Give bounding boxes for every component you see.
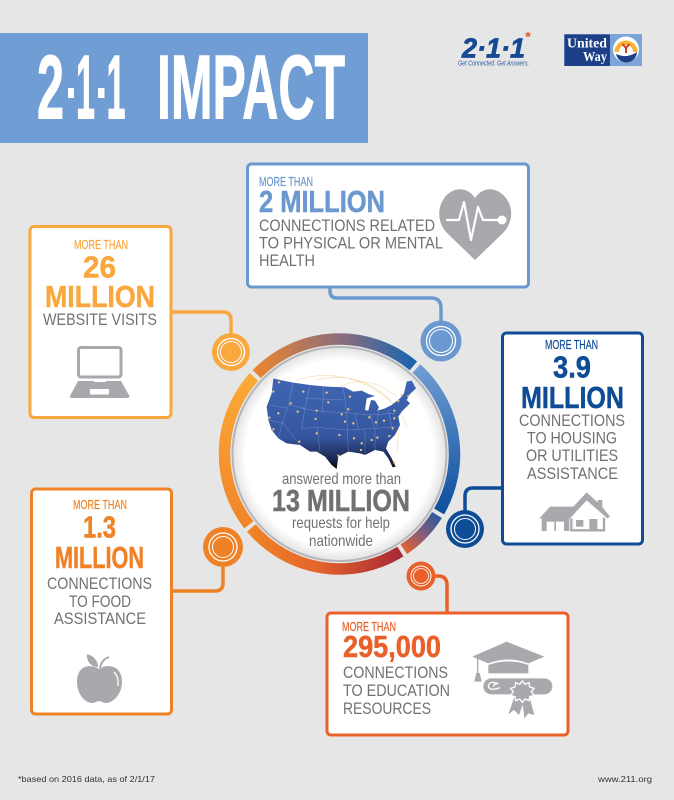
panel: food [32, 489, 172, 714]
panel: housing [502, 333, 642, 544]
heading: 3.9 million [521, 338, 624, 415]
text: housing description: CONNECTIONS [519, 411, 625, 430]
footnote: *based on 2016 data, as of 2/1/17 [18, 774, 155, 784]
text: housing description [519, 411, 625, 483]
heading: 3.9 million: 3.9 [553, 350, 591, 384]
text: education description: CONNECTIONS [343, 663, 448, 682]
icon: graduation cap and diploma [472, 642, 552, 718]
node: website [212, 333, 250, 371]
text: food description [47, 574, 152, 628]
text: education description [343, 663, 450, 718]
panel: education [327, 613, 568, 735]
heading: 3.9 million: MILLION [521, 380, 624, 415]
title banner [0, 33, 368, 143]
icon: house [539, 492, 610, 531]
text: education description: TO EDUCATION [343, 681, 450, 700]
connector: website [171, 312, 231, 338]
logo: 2-1-1: 2·1·1 [461, 32, 525, 64]
text: education description: RESOURCES [343, 699, 431, 718]
text: health description: TO PHYSICAL OR MENTAL [259, 234, 443, 252]
panel: health [248, 164, 528, 287]
text: housing description: OR UTILITIES [526, 446, 618, 465]
title: 1 [76, 38, 95, 138]
heading: 1.3 million [55, 498, 144, 575]
title: IMPACT [157, 38, 345, 138]
panel: website visits [30, 226, 171, 418]
central text: requests for help [292, 515, 390, 532]
text: health description: HEALTH [259, 251, 315, 270]
logo: United Way [564, 34, 642, 66]
central ring [224, 339, 455, 569]
US map [267, 375, 416, 469]
node: education [406, 562, 436, 590]
heading: 1.3 million: MORE THAN [73, 498, 127, 512]
central text: nationwide [309, 533, 373, 550]
node: food [203, 527, 243, 567]
central text: answered more than [282, 471, 401, 488]
central text [272, 471, 410, 550]
heading: 26 million: MORE THAN [74, 238, 128, 252]
heading: 295,000: MORE THAN [342, 620, 396, 634]
node: health [420, 320, 462, 362]
heading: 295,000: 295,000 [343, 629, 441, 664]
icon: apple [77, 654, 122, 703]
connector: housing [465, 488, 502, 515]
heading: 2 million: MORE THAN [259, 175, 313, 189]
heading: 1.3 million: 1.3 [83, 510, 116, 544]
title [37, 38, 345, 138]
text: health description [259, 216, 443, 270]
icon: laptop [70, 348, 130, 398]
central text: 13 MILLION [272, 483, 410, 518]
text: health description: CONNECTIONS RELATED [259, 216, 435, 235]
connector: food [172, 560, 223, 591]
central disc [232, 347, 446, 561]
heading: 26 million: 26 [83, 250, 116, 284]
text: food description: ASSISTANCE [54, 609, 146, 628]
heading: 3.9 million: MORE THAN [545, 338, 598, 352]
text: housing description: TO HOUSING [527, 428, 617, 448]
text: food description: TO FOOD [69, 592, 131, 611]
connector: health [330, 287, 441, 325]
text: website visits: WEBSITE VISITS [43, 310, 157, 329]
heading: 26 million: MILLION [45, 279, 155, 314]
heading: 1.3 million: MILLION [55, 540, 144, 575]
logo: United Way: Way [583, 50, 607, 65]
logo: United Way: United [567, 37, 607, 52]
title: 1 [106, 38, 126, 138]
heading: 26 million [45, 238, 155, 314]
heading: 2 million [259, 175, 385, 219]
heading: 2 million: 2 MILLION [259, 185, 385, 219]
website url: www.211.org [597, 774, 652, 784]
node: housing [446, 510, 484, 548]
icon: heart [439, 189, 511, 260]
text: housing description: ASSISTANCE [527, 464, 618, 483]
connector: education [430, 576, 447, 612]
title: 2 [37, 38, 64, 138]
text: food description: CONNECTIONS [47, 574, 152, 593]
logo: 2-1-1: Get Connected. Get Answers. [458, 59, 529, 68]
